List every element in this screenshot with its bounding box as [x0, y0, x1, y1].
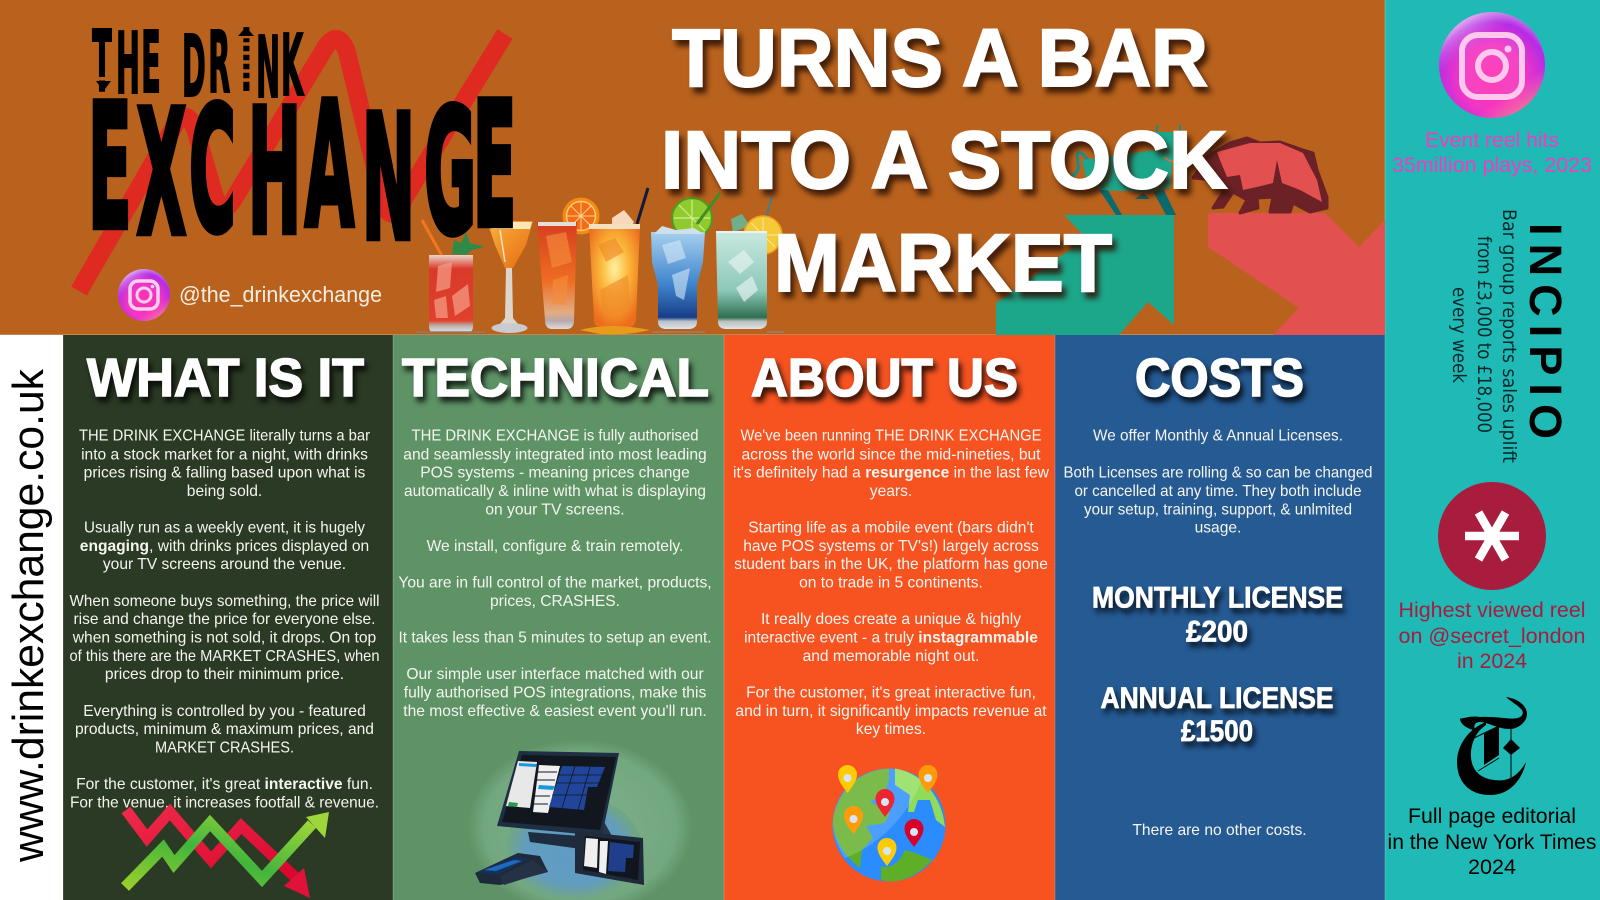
text block: what is it: Usually run as a weekly event, it is hugely [84, 520, 365, 537]
POS monitor [497, 751, 619, 852]
text block: event reel: Event reel hits [1425, 128, 1559, 152]
illustration: POS terminals [467, 739, 693, 900]
text block: licenses intro: We offer Monthly & Annual Licenses. [1093, 428, 1343, 444]
text block: what is it: engaging, with drinks prices displayed on [80, 538, 369, 555]
text block: technical: Our simple user interface matched with our [406, 666, 704, 683]
instagram handle: @the_drinkexchange [179, 282, 382, 307]
text block: no other costs: There are no other costs. [1132, 822, 1307, 839]
text block: about us: it's definitely had a resurgence in the last few [733, 465, 1049, 482]
title: MARKET [774, 218, 1112, 309]
text block: about us: It really does create a unique & highly [761, 611, 1021, 628]
text block: about us: For the customer, it's great interactive fun, [746, 684, 1036, 702]
panel: credentials sidebar background [1385, 0, 1600, 900]
cocktail: orange yellow with straw [580, 188, 650, 334]
POS tablet [575, 831, 644, 885]
text block: technical: the most effective & easiest event you'll run. [403, 703, 707, 720]
text block: incipio sales uplift: from £3,000 to £18,000 [1473, 236, 1495, 433]
text block: about us: years. [870, 483, 912, 500]
text block: about us: on to trade in 5 continents. [799, 575, 983, 592]
logo: exchange wordmark: EXCHANGE [88, 66, 516, 279]
text block: nyt editorial: in the New York Times [1388, 830, 1596, 854]
text block: about us: across the world since the mid-nineties, but [741, 446, 1041, 463]
text block: what is it: When someone buys something, the price will [70, 593, 380, 610]
panel: credentials sidebar [1388, 12, 1596, 879]
text block: secret london reel: on @secret_london [1398, 624, 1586, 648]
title [661, 13, 1227, 309]
text block: technical: on your TV screens. [485, 501, 625, 518]
panel: what is it background [63, 335, 393, 900]
text block: licenses intro: your setup, training, support, & unlmited [1084, 501, 1352, 518]
logo: the drink wordmark: THE DRINK [92, 11, 305, 117]
text block: what is it: MARKET CRASHES. [155, 739, 294, 756]
cocktail: orange slice [562, 198, 600, 234]
price: annual license: ANNUAL LICENSE [1100, 682, 1334, 715]
cocktail: orange martini [487, 221, 533, 333]
icon: new york times logo [1457, 697, 1527, 795]
illustration: cocktail row [416, 188, 784, 334]
text block: about us: key times. [856, 721, 926, 738]
text block: what is it: products, minimum & maximum prices, and [75, 721, 374, 738]
text block: what is it: of this there are the MARKET CRASHES, when [70, 648, 380, 665]
text block: what is it: prices drop to their minimum price. [105, 666, 344, 683]
price: annual license: £1500 [1181, 715, 1253, 748]
cocktail: lime slice [672, 193, 720, 238]
text block: about us: interactive event - a truly instagrammable [744, 630, 1038, 646]
panel: technical background [393, 335, 724, 900]
text block: technical: THE DRINK EXCHANGE is fully authorised [412, 428, 698, 444]
icon: bull [1070, 125, 1180, 215]
icon: globe with pins [832, 765, 946, 882]
text block: what is it: prices rising & falling based upon what is [84, 465, 366, 482]
price: annual license [1100, 682, 1334, 748]
text block: nyt editorial: Full page editorial [1408, 804, 1576, 828]
website url: www.drinkexchange.co.uk [4, 368, 53, 863]
cocktail: lemon slice [731, 196, 782, 254]
text block: what is it: your TV screens around the venue. [103, 556, 346, 573]
text block: incipio sales uplift: Bar group reports sales uplift [1498, 209, 1520, 463]
panel: technical [398, 348, 712, 900]
text block: event reel: 35million plays, 2023 [1392, 153, 1592, 177]
heading: what is it: WHAT IS IT [87, 348, 364, 408]
text block: technical: and seamlessly integrated into most leading [403, 446, 707, 463]
text block: technical: It takes less than 5 minutes to setup an event. [398, 630, 712, 646]
heading: costs: COSTS [1135, 348, 1304, 408]
heading: about us: ABOUT US [751, 348, 1018, 408]
icon: green up arrow [996, 215, 1174, 335]
text block: licenses intro: or cancelled at any time. They both include [1074, 483, 1362, 500]
text block: technical: We install, configure & train remotely. [427, 538, 683, 555]
text block: nyt editorial: 2024 [1468, 855, 1516, 879]
text block: technical: automatically & inline with what is displaying [404, 483, 706, 500]
icon: logo arrows [90, 27, 256, 91]
price: monthly license: £200 [1186, 616, 1248, 648]
title: TURNS A BAR [672, 13, 1208, 104]
text block: licenses intro: usage. [1195, 520, 1241, 537]
icon: asterisk badge [1438, 482, 1546, 590]
text block: what is it: For the customer, it's great interactive fun. [76, 776, 373, 793]
text block: incipio sales uplift: every week [1448, 287, 1470, 383]
price: monthly license: MONTHLY LICENSE [1092, 582, 1343, 614]
text block: technical: prices, CRASHES. [490, 593, 620, 610]
text block: what is it: into a stock market for a night, with drinks [81, 446, 368, 463]
cocktail: blue [651, 226, 705, 329]
logo: the drink exchange [79, 11, 516, 291]
text block: licenses intro: Both Licenses are rolling & so can be changed [1064, 465, 1372, 482]
text block: technical: fully authorised POS integrations, make this [404, 684, 706, 702]
icon: large instagram badge [1439, 12, 1545, 118]
price: monthly license [1092, 582, 1343, 648]
panel: header background [0, 0, 1385, 335]
text block: about us: have POS systems or TV's!) largely across [743, 538, 1039, 555]
text block: technical: You are in full control of the market, products, [398, 575, 712, 592]
text block: about us: and in turn, it significantly impacts revenue at [735, 703, 1047, 720]
text block: incipio sales uplift [1448, 209, 1520, 463]
cocktail: green mint [652, 232, 784, 332]
text block: what is it: Everything is controlled by you - featured [83, 703, 366, 720]
panel: costs background [1055, 335, 1385, 900]
heading: technical: TECHNICAL [402, 348, 709, 408]
text block: technical: POS systems - meaning prices change [420, 465, 690, 482]
panel: what is it [70, 348, 380, 898]
text block: about us: We've been running THE DRINK EXCHANGE [740, 428, 1042, 444]
text block: about us: student bars in the UK, the platform has gone [734, 556, 1048, 573]
text block: what is it: For the venue, it increases footfall & revenue. [70, 794, 379, 811]
text block: what is it: rise and change the price for everyone else. [74, 611, 376, 628]
chart: zigzag market lines [125, 810, 329, 898]
icon: bear [1193, 138, 1327, 213]
POS card reader [475, 853, 548, 885]
panel: costs [1064, 348, 1372, 839]
panel: about us [733, 348, 1050, 882]
icon: small instagram badge [118, 269, 170, 321]
text block: about us: and memorable night out. [803, 648, 979, 665]
panel: about us background [724, 335, 1055, 900]
logo: red zigzag line [79, 34, 505, 291]
cocktail: red with mint [416, 220, 485, 332]
icon: red down arrow [1208, 213, 1385, 335]
text block: secret london reel: Highest viewed reel [1398, 598, 1586, 622]
text block: what is it: when something is not sold, it drops. On top [72, 630, 377, 646]
cocktail: tall red orange [537, 222, 577, 329]
text block: secret london reel: in 2024 [1457, 649, 1527, 673]
title: INTO A STOCK [661, 115, 1227, 206]
text block: what is it: THE DRINK EXCHANGE literally turns a bar [79, 428, 370, 444]
incipio name: INCIPIO [1520, 223, 1571, 439]
text block: about us: Starting life as a mobile event (bars didn't [748, 520, 1034, 537]
text block: what is it: being sold. [187, 483, 262, 500]
panel: left url strip [0, 335, 63, 900]
